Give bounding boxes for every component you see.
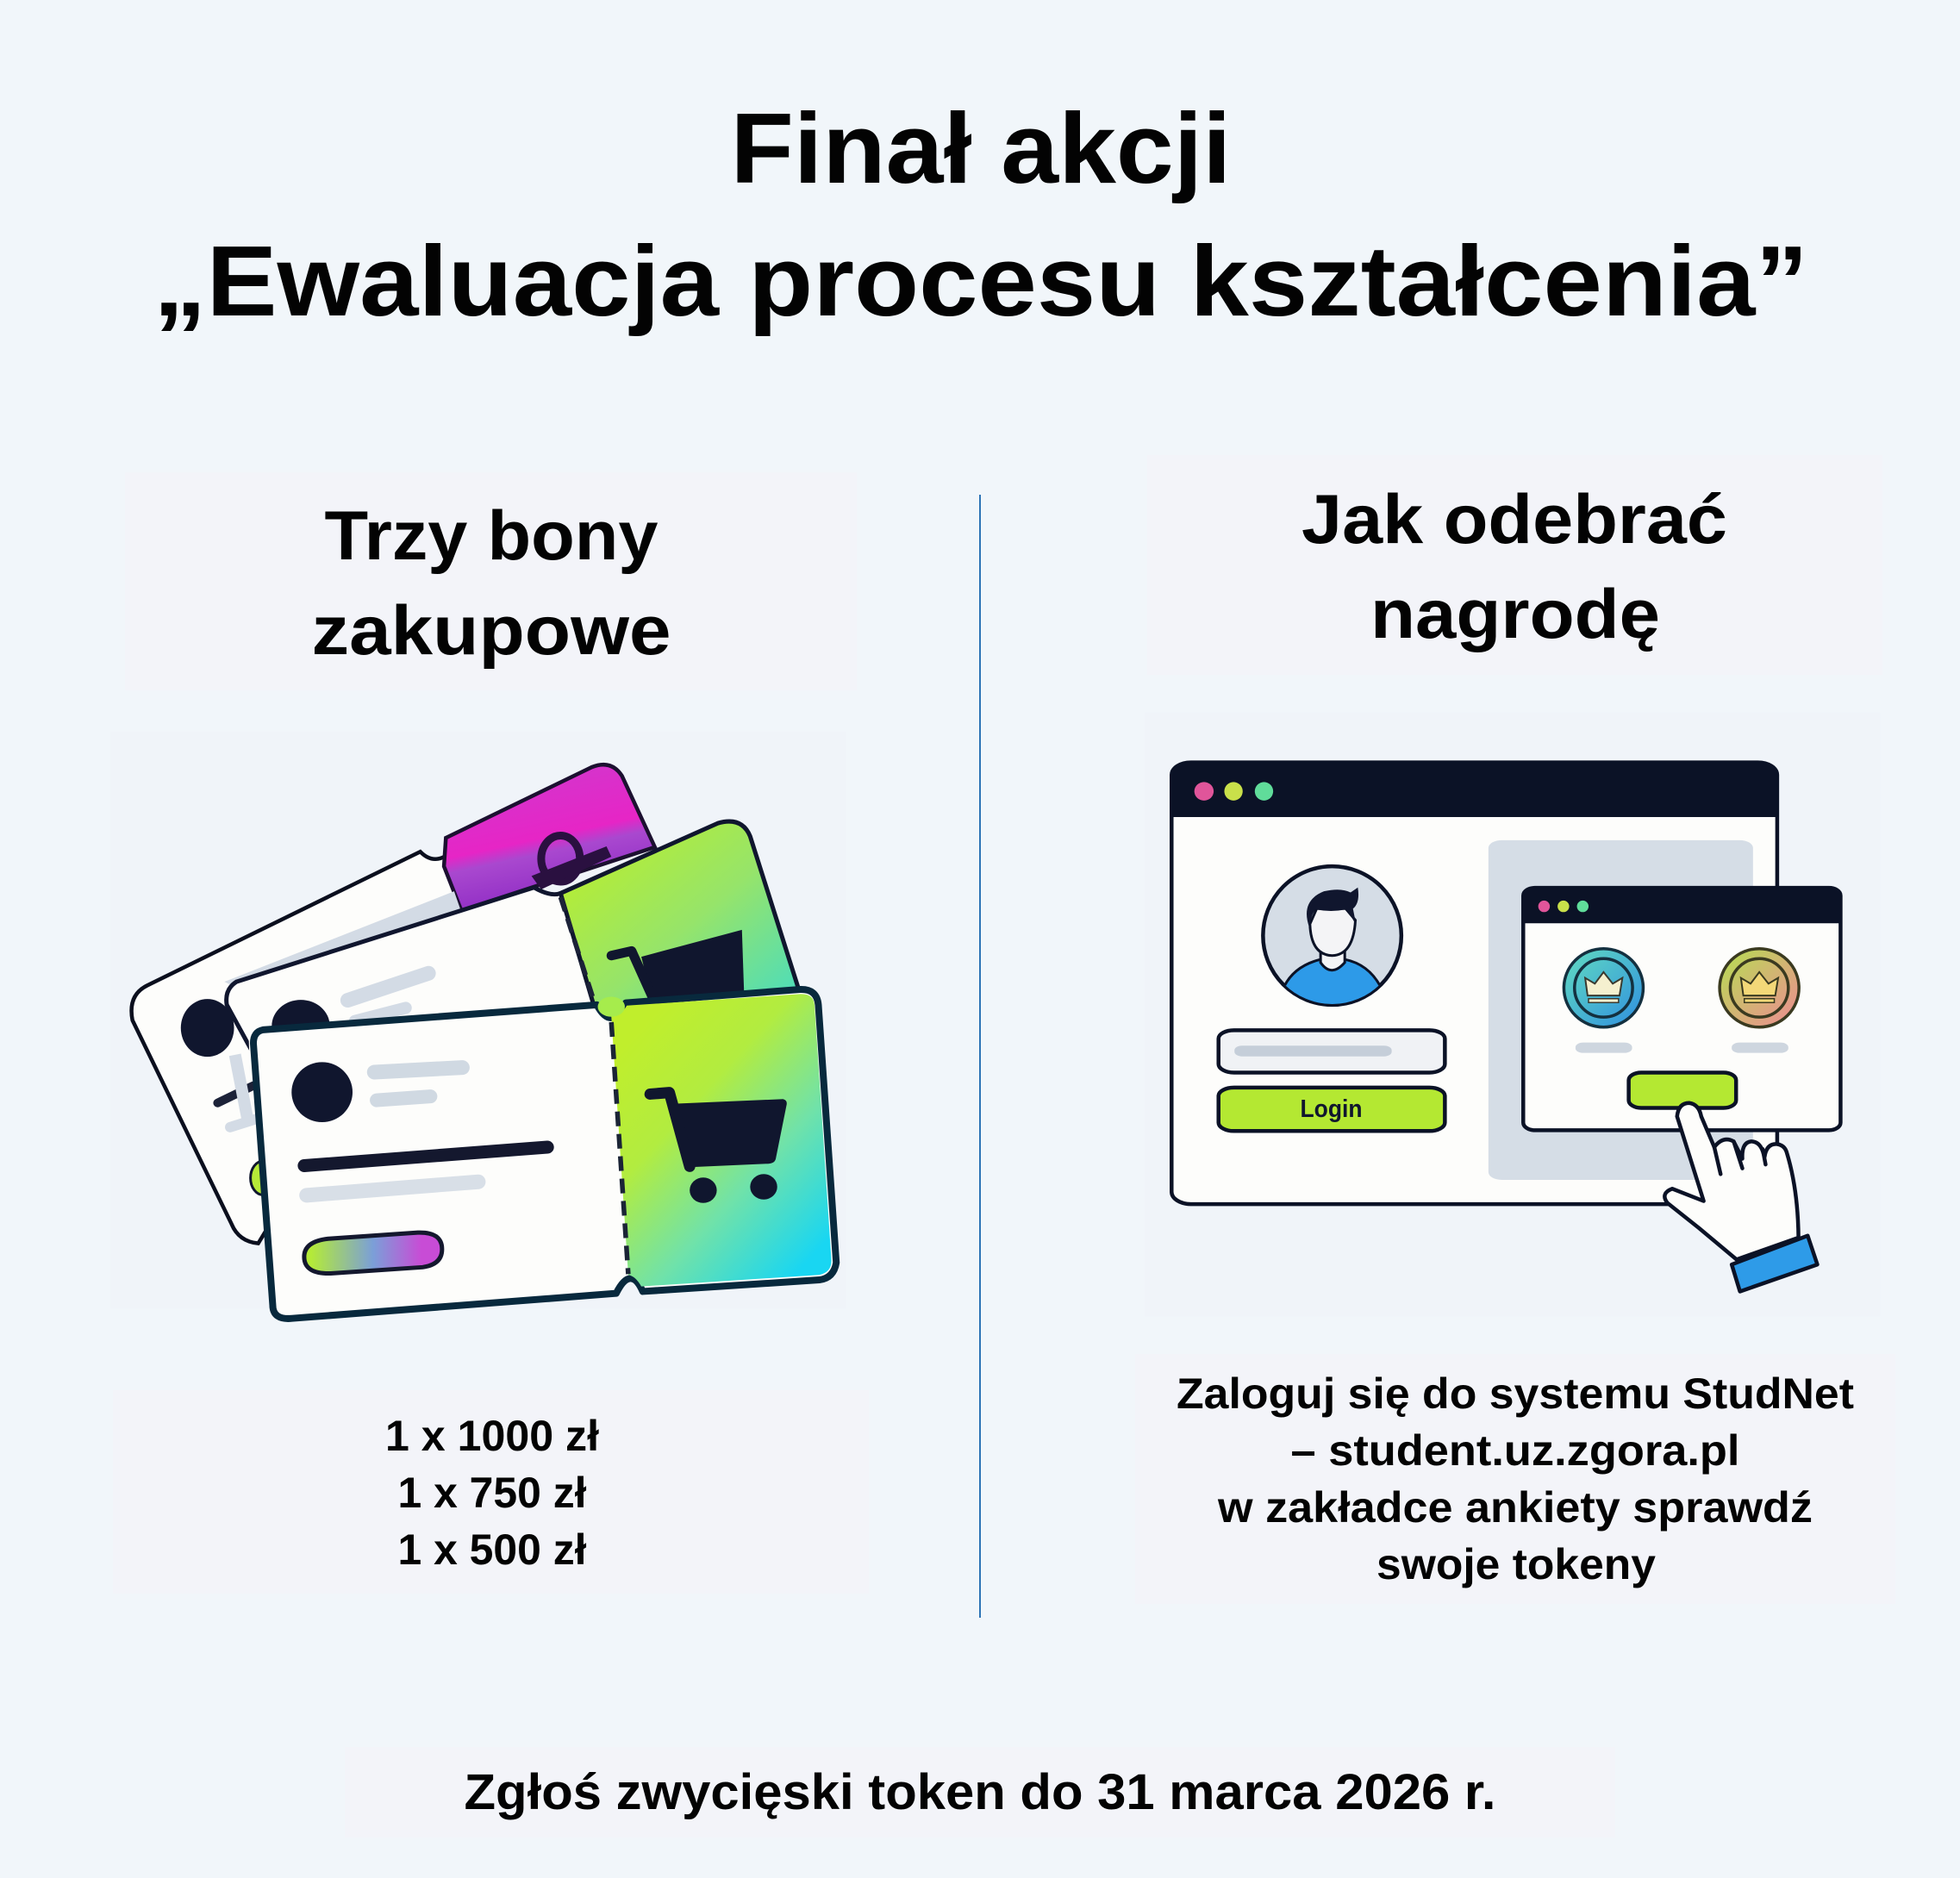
voucher: back bbox=[132, 764, 655, 1244]
input field bbox=[1219, 1030, 1445, 1072]
title bbox=[153, 92, 1808, 337]
login button: Login bbox=[1300, 1095, 1362, 1123]
panel: voucher amounts: 1 x 750 zł bbox=[398, 1469, 587, 1517]
panel: instructions: – student.uz.zgora.pl bbox=[1291, 1426, 1739, 1475]
panel: deadline: Zgłoś zwycięski token do 31 marca 2026 r. bbox=[464, 1764, 1496, 1820]
icon: coin teal bbox=[1564, 949, 1643, 1027]
icon: pointing hand bbox=[1664, 1103, 1817, 1291]
divider bbox=[979, 495, 981, 1618]
illustration: login window bbox=[1170, 760, 1843, 1294]
title: „Ewaluacja procesu kształcenia” bbox=[153, 225, 1808, 337]
panel: voucher amounts: 1 x 500 zł bbox=[398, 1525, 587, 1574]
voucher: middle bbox=[227, 821, 800, 1063]
login button bbox=[1219, 1088, 1445, 1131]
icon: user avatar bbox=[1263, 866, 1401, 1008]
window: main bbox=[1170, 763, 1778, 1204]
panel: instructions: w zakładce ankiety sprawdź bbox=[1217, 1483, 1813, 1532]
illustration: vouchers bbox=[110, 732, 846, 1319]
panel: heading trzy bony: zakupowe bbox=[312, 592, 671, 670]
window: rewards bbox=[1522, 888, 1842, 1130]
panel: instructions bbox=[1135, 1354, 1895, 1604]
panel: deadline bbox=[345, 1747, 1615, 1837]
panel: heading trzy bony bbox=[125, 472, 857, 690]
icon: shopping cart bbox=[650, 1093, 787, 1203]
title: Finał akcji bbox=[731, 92, 1231, 204]
panel: voucher amounts: 1 x 1000 zł bbox=[385, 1412, 599, 1460]
panel: heading jak odebrać nagrodę bbox=[1147, 455, 1882, 675]
panel: instructions: Zaloguj się do systemu StudNet bbox=[1177, 1370, 1854, 1418]
icon: coin gold bbox=[1720, 949, 1799, 1027]
panel: instructions: swoje tokeny bbox=[1376, 1540, 1656, 1588]
panel: heading jak odebrać nagrodę: Jak odebrać bbox=[1301, 481, 1727, 558]
panel: heading trzy bony: Trzy bony bbox=[324, 497, 659, 575]
panel: voucher amounts bbox=[113, 1390, 869, 1594]
panel: heading jak odebrać nagrodę: nagrodę bbox=[1370, 576, 1660, 653]
voucher: front bbox=[253, 989, 836, 1319]
